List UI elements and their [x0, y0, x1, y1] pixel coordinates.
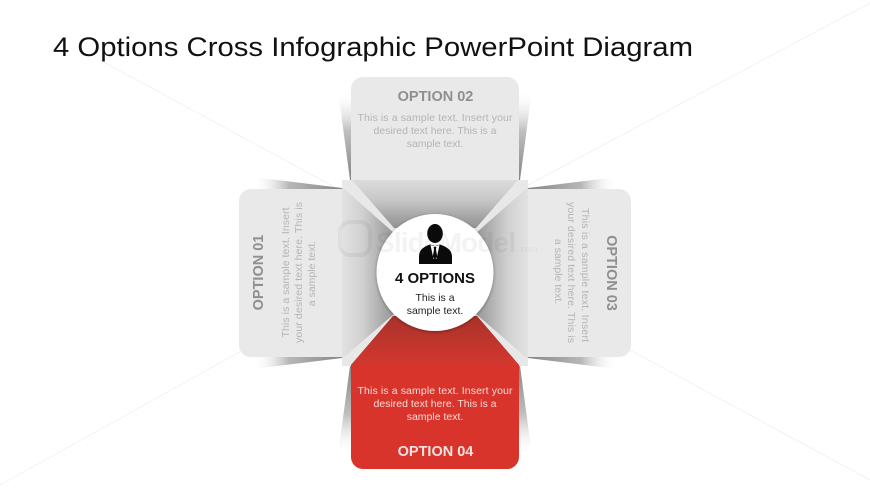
- heading: 4 options: 4 OPTIONS: [395, 270, 475, 287]
- title: 4 Options Cross Infographic PowerPoint Diagram: [53, 32, 693, 62]
- heading: option 02: OPTION 02: [398, 89, 473, 105]
- text: center body: This is a: [415, 292, 455, 304]
- text: option 04 body: [358, 385, 513, 423]
- icon: businessman: [419, 224, 452, 264]
- left trapezoid: [342, 187, 394, 359]
- text: center body: [407, 292, 463, 317]
- panel: center square: [342, 180, 528, 366]
- panel: option 03: [528, 177, 631, 369]
- center circle: [340, 214, 538, 331]
- watermark: [340, 222, 538, 258]
- panel: option 01: [239, 177, 342, 369]
- text: option 01 body: a sample text.: [306, 241, 318, 306]
- text: option 01 body: your desired text here. This is: [293, 202, 305, 343]
- watermark: .com: [518, 244, 538, 254]
- text: option 03 body: [552, 202, 591, 343]
- watermark: SlideModel: [376, 227, 516, 258]
- text: option 03 body: your desired text here. This is: [565, 202, 577, 343]
- text: option 02 body: desired text here. This is a: [374, 125, 497, 137]
- text: option 03 body: a sample text.: [552, 239, 564, 304]
- text: option 04 body: sample text.: [407, 411, 463, 423]
- top trapezoid: [352, 180, 518, 228]
- heading: option 04: OPTION 04: [398, 444, 473, 460]
- right trapezoid: [476, 187, 528, 359]
- text: option 02 body: [358, 112, 513, 150]
- text: option 03 body: This is a sample text. Insert: [579, 208, 591, 342]
- panel: option 04: [338, 316, 532, 469]
- text: option 04 body: This is a sample text. Insert your: [358, 385, 513, 397]
- text: option 02 body: sample text.: [407, 138, 463, 150]
- heading: option 01: OPTION 01: [251, 235, 267, 310]
- text: option 04 body: desired text here. This is a: [374, 398, 497, 410]
- panel: option 02: [338, 77, 532, 180]
- text: option 01 body: This is a sample text. Insert: [280, 207, 292, 338]
- text: option 02 body: This is a sample text. Insert your: [358, 112, 513, 124]
- text: option 01 body: [280, 202, 318, 343]
- heading: option 03: OPTION 03: [603, 235, 619, 311]
- text: center body: sample text.: [407, 305, 463, 317]
